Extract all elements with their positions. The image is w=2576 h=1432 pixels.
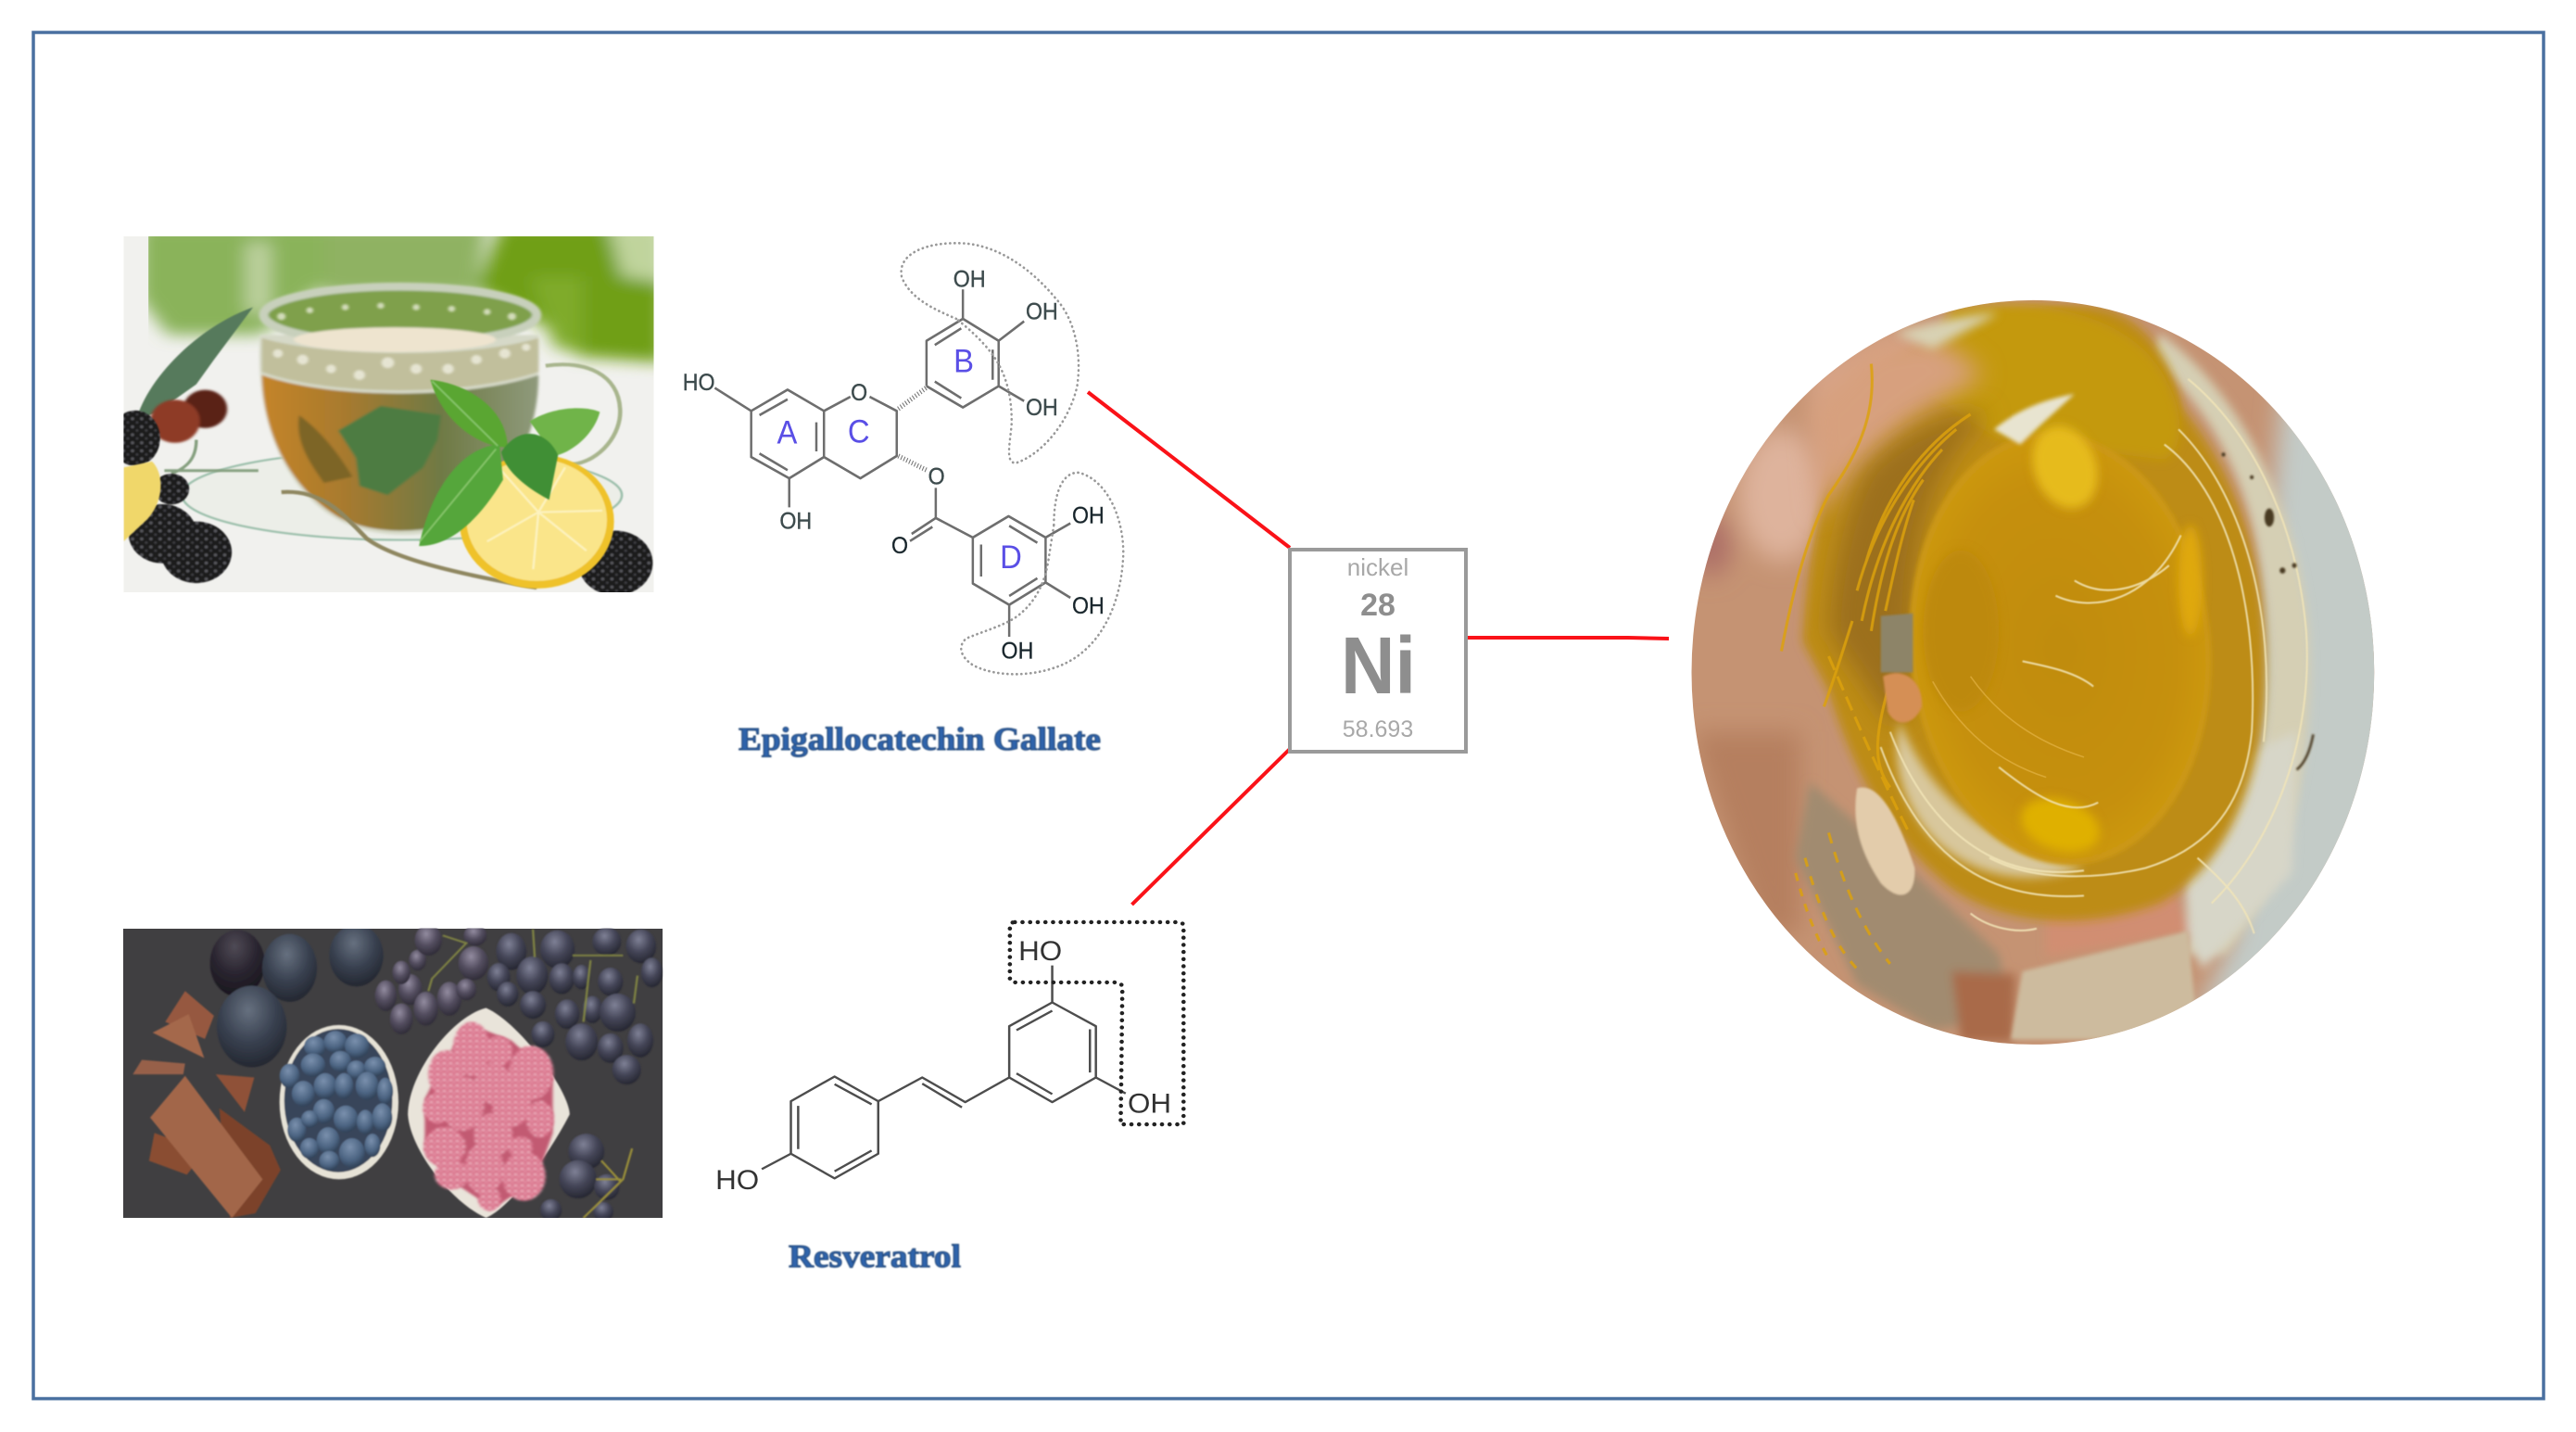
- panel: honey-coloured gel photo: [1692, 300, 2374, 1045]
- atom labels: [683, 267, 1105, 664]
- saucer: [183, 450, 622, 540]
- atom labels: OH: [953, 267, 986, 293]
- stem: [164, 439, 259, 474]
- raspberry bowl: [408, 1008, 570, 1218]
- dotted loop: ring B hydroxyls: [902, 243, 1079, 463]
- dark marks: [2221, 452, 2313, 769]
- hashed stereo bonds: [899, 387, 927, 470]
- arrow: nickel to hydrogel: [1468, 638, 1669, 639]
- panel: tea photo: [110, 224, 664, 595]
- ring letters: C: [848, 413, 870, 450]
- atom labels: OH: [1072, 593, 1105, 619]
- atom labels: OH: [1026, 299, 1058, 325]
- caption: Resveratrol: Resveratrol: [789, 1238, 961, 1274]
- blueberry bowl: [280, 1025, 398, 1179]
- top honey lobe: [1913, 304, 2179, 460]
- top-left highlights on glass: [1994, 394, 2075, 445]
- hydroxyl labels: HO: [715, 1166, 759, 1196]
- raspberries: [150, 390, 227, 443]
- EGCG structure: [683, 243, 1123, 674]
- atom labels: O: [928, 464, 945, 490]
- dark streaked band: [1828, 413, 1989, 722]
- hydroxyl labels: HO: [1018, 937, 1062, 967]
- atom labels: OH: [1072, 503, 1105, 529]
- element symbol: Ni: [1341, 621, 1416, 711]
- arrow: resveratrol to nickel: [1132, 749, 1290, 905]
- plums: [210, 925, 384, 1067]
- element name: nickel: [1347, 553, 1408, 581]
- dotted loop: ring D hydroxyls: [961, 473, 1123, 674]
- chocolate pieces: [133, 991, 281, 1218]
- caption: Epigallocatechin Gallate: Epigallocatechin Gallate: [739, 721, 1101, 757]
- spoon: [282, 492, 537, 588]
- glass swirl lines: [1881, 379, 2307, 933]
- atom labels: OH: [779, 509, 812, 535]
- skin wedge over upper left: [1810, 334, 1985, 515]
- dotted box: hydroxyl binding sites: [1010, 922, 1183, 1124]
- blackberries: [110, 411, 652, 595]
- resveratrol structure: [715, 922, 1183, 1196]
- bonds: [762, 966, 1126, 1178]
- left leaf: [136, 307, 253, 421]
- hydroxyl labels: OH: [1128, 1089, 1171, 1119]
- skin and background tones: [1696, 339, 2374, 1000]
- atom labels: HO: [683, 370, 715, 396]
- condensation droplets: [273, 302, 530, 380]
- ring letters: D: [1000, 539, 1022, 576]
- photo background foliage: [140, 224, 664, 362]
- tape and finger details: [1855, 614, 1922, 895]
- ring letters: B: [953, 344, 974, 380]
- bright highlights: [1924, 414, 2203, 860]
- cup handle: [546, 364, 620, 464]
- bonds: [714, 289, 1070, 637]
- atomic number: 28: [1360, 588, 1395, 623]
- atom labels: OH: [1002, 639, 1033, 664]
- mint leaves: [419, 380, 600, 546]
- grapes: [375, 925, 663, 1222]
- right glass band: [2150, 334, 2310, 954]
- central honey pool: [1889, 416, 2231, 881]
- atom labels: O: [851, 380, 867, 406]
- arrow: EGCG to nickel: [1088, 392, 1290, 548]
- left lemon wedge: [123, 462, 160, 541]
- outer streaky honey ring: [1802, 306, 2266, 920]
- lemon slice: [460, 454, 614, 589]
- hydroxyl labels: [715, 937, 1171, 1196]
- tea cup: [259, 286, 539, 535]
- tan label patch: [2011, 931, 2195, 1039]
- atom labels: O: [891, 533, 908, 559]
- atom labels: OH: [1026, 395, 1058, 421]
- nickel element tile: [1290, 550, 1466, 752]
- grey glass swirl region: [1897, 722, 2084, 878]
- ring letters: [777, 344, 1022, 576]
- panel: berries and chocolate photo: [123, 925, 663, 1222]
- lower-left grey-brown jar tones: [1796, 732, 2297, 1042]
- atomic mass: 58.693: [1343, 716, 1413, 742]
- amber streak lines on left: [1781, 363, 1971, 969]
- ring letters: A: [777, 415, 798, 451]
